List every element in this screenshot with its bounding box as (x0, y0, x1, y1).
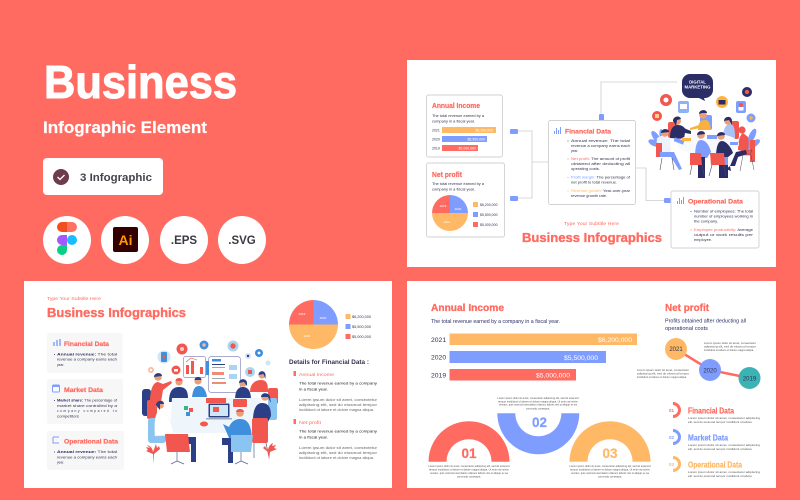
heading: business infographics (522, 221, 662, 245)
card: operational data (47, 431, 124, 470)
list item: financial data: elit, sed do eiusmod tempor incididunt ut labore (688, 420, 752, 424)
pie chart: 2019 (299, 312, 306, 316)
semicircle 01: veniam, quis nostrud exercitation ullamco laboris nisi ut aliquip ex ea (430, 471, 508, 475)
card: financial data: operating costs. (571, 167, 600, 171)
semicircle 02: commodo consequat. (526, 406, 550, 410)
heading: business infographics: Business Infographics (522, 230, 662, 245)
card: annual income: company in a fiscal year. (432, 120, 475, 124)
card: operational data: year. (57, 460, 64, 464)
list item: market data: elit, sed do eiusmod tempor incididunt ut labore (688, 447, 752, 451)
icon: EPS: .EPS (171, 235, 197, 247)
heading: net profit (665, 302, 746, 332)
card: financial data: year. (57, 363, 64, 367)
card: financial data (47, 333, 122, 373)
card: financial data: revenue a company earns each (57, 358, 117, 362)
speech bubble: DIGITAL (689, 80, 706, 84)
list item: operational data: Operational Data (688, 460, 743, 470)
card: annual income: The total revenue earned by a (432, 114, 484, 118)
list item: operational data (669, 456, 760, 478)
card: financial data: Revenue growth: Year-over-year (571, 189, 631, 193)
timeline: net profit: incididunt ut labore et dolore magna aliqua. (704, 348, 754, 352)
details: net profit: Lorem ipsum dolor sit amet, consectetur (299, 446, 378, 450)
card: annual income: 2021 (432, 128, 440, 132)
pie chart (289, 300, 338, 349)
table (170, 398, 264, 433)
card: annual income: Annual Income (432, 103, 480, 110)
details: net profit: Net profit (299, 420, 322, 426)
heading: Business Infographics (47, 305, 186, 320)
pie chart: 2021 (444, 220, 451, 224)
card: annual income: 2020 (432, 138, 440, 142)
card: annual income: 2019 (432, 146, 440, 150)
timeline: net profit: Lorem ipsum dolor sit amet, consectetur (637, 368, 689, 372)
pie legend: $6,200,000 (352, 315, 371, 319)
list item: financial data (669, 402, 760, 424)
semicircle 01: commodo consequat. (457, 474, 481, 478)
heading: Type Your Subtitle Here (47, 296, 101, 301)
list item: financial data: Lorem ipsum dolor sit amet, consectetur adipiscing (688, 416, 760, 420)
semicircle 01: Lorem ipsum dolor sit amet, consectetur adipiscing elit, sed do eiusmod (428, 464, 510, 468)
card: financial data: revenue a company earns each (571, 144, 630, 148)
semicircle 02: 02 (532, 415, 547, 430)
back people (670, 125, 691, 139)
list item: financial data: 01 (669, 408, 675, 413)
card: operational data: output or work results per (694, 233, 754, 237)
right front person (222, 438, 233, 463)
card: market data (47, 379, 123, 424)
icon: illustrator: Ai (118, 232, 132, 248)
card: net profit: $6,200,000 (480, 203, 498, 207)
heading: net profit: Net profit (665, 302, 709, 314)
report bubble (208, 356, 240, 392)
pie chart: 2020 (455, 207, 462, 211)
card: annual income: $5,000,000 (458, 146, 476, 150)
card: net profit (426, 163, 504, 237)
card: market data: Market share: The percentage of (57, 398, 117, 402)
card: operational data: Employee productivity: Average (694, 228, 753, 232)
icon: illustrator (101, 216, 149, 264)
card: operational data: the company. (694, 220, 718, 224)
badge: 3 infographic: 3 Infographic (80, 172, 152, 184)
semicircle 03: veniam, quis nostrud exercitation ullamco laboris nisi ut aliquip ex ea (571, 471, 649, 475)
list item: market data (669, 429, 760, 451)
card: net profit: The total revenue earned by a (432, 182, 484, 186)
card: operational data: Number of employees: The total (694, 210, 753, 214)
timeline: net profit: Lorem ipsum dolor sit amet, consectetur (704, 341, 756, 345)
pie chart: 2021 (304, 334, 311, 338)
card: net profit: Net profit (432, 172, 463, 179)
card: financial data: Financial Data (64, 341, 110, 348)
badge: 3 infographic (43, 158, 163, 195)
table items (184, 406, 188, 410)
chairs back (142, 389, 151, 416)
subtitle: Infographic Element (43, 118, 207, 137)
card: operational data (671, 191, 759, 248)
details: annual income (294, 371, 378, 412)
card: net profit: $5,000,000 (480, 223, 498, 227)
card: net profit: $5,500,000 (480, 213, 498, 217)
pie chart: 2020 (320, 316, 327, 320)
bar chart: $5,500,000 (564, 355, 598, 362)
card: financial data: net profit to total revenue. (571, 180, 617, 184)
main title: Business (44, 56, 237, 108)
heading: business infographics: Type Your Subtitle Here (564, 221, 620, 226)
illustration: meeting table (142, 340, 278, 464)
list item: market data: 02 (669, 435, 675, 440)
side right person (253, 403, 271, 422)
pie chart (432, 195, 468, 231)
speech bubble: MARKETING (684, 84, 711, 90)
details: annual income: Annual Income (299, 372, 334, 378)
back row people (150, 381, 172, 402)
semicircle 01: tempor incididunt ut labore et dolore magna aliqua. Ut enim ad minim (429, 468, 510, 472)
details: net profit: The total revenue earned by a company (299, 428, 377, 434)
connectors (518, 82, 677, 200)
timeline: net profit: incididunt ut labore et dolore magna aliqua. (637, 375, 687, 379)
card: operational data: employee. (694, 238, 712, 242)
semicircle 01 (428, 421, 510, 478)
left front person (148, 418, 166, 443)
details: net profit: adipiscing elit, sed do eiusmod tempor (299, 451, 378, 455)
card: financial data: year. (571, 149, 578, 153)
card: market data: market share controlled by a (57, 404, 117, 408)
back chairs (668, 122, 677, 138)
card: financial data: Profit margin: The percentage of (571, 176, 630, 180)
illustration: digital marketing team (647, 74, 761, 178)
heading: annual income: The total revenue earned by a company in a fiscal year. (431, 319, 560, 325)
card: operational data: Operational Data (64, 438, 119, 446)
pie legend (346, 314, 371, 339)
timeline: net profit (637, 338, 760, 389)
details: annual income: adipiscing elit, sed do eiusmod tempor (299, 403, 378, 407)
semicircle 01: 01 (461, 446, 477, 461)
details: net profit (294, 419, 378, 460)
heading: net profit: Profits obtained after deducting all (665, 318, 746, 324)
table (677, 133, 739, 155)
laptop (208, 404, 230, 418)
details: net profit: incididunt ut labore et dolore magna aliqua. (299, 456, 374, 460)
heading: annual income: Annual Income (431, 302, 504, 314)
list item: operational data: Lorem ipsum dolor sit amet, consectetur adipiscing (688, 470, 760, 474)
list item: market data: Market Data (688, 434, 729, 442)
panel: top right mind map (407, 60, 776, 267)
icon: figma (43, 216, 91, 264)
details heading: Details for Financial Data : (289, 359, 369, 366)
timeline: net profit: 2021 (669, 347, 683, 353)
semicircle 02: veniam, quis nostrud exercitation ullamco laboris nisi ut aliquip ex ea (499, 403, 577, 407)
icon: EPS (160, 216, 208, 264)
list item: operational data: elit, sed do eiusmod tempor incididunt ut labore (688, 474, 752, 478)
card: market data: company compared to (57, 409, 117, 413)
timeline: net profit: adipiscing elit, sed do eiusmod tempor (637, 372, 689, 376)
card: financial data: obtained after deducting all (571, 162, 630, 166)
card: annual income (426, 95, 502, 157)
chart bubble (184, 356, 206, 378)
card: financial data: Net profit: The amount of profit (571, 157, 630, 161)
card: operational data: number of employees working in (694, 214, 753, 218)
card: annual income: $6,200,000 (475, 128, 493, 132)
card: financial data (548, 120, 636, 204)
semicircle 02: Lorem ipsum dolor sit amet, consectetur adipiscing elit, sed do eiusmod (498, 396, 579, 400)
heading: annual income (431, 302, 560, 325)
pie chart: 2019 (440, 204, 447, 208)
heading: net profit: operational costs (665, 326, 709, 332)
card: financial data: Financial Data (565, 128, 611, 136)
semicircle 03 (570, 421, 651, 478)
card: operational data: Annual revenue: The total (57, 450, 117, 454)
details: annual income: Lorem ipsum dolor sit amet, consectetur (299, 398, 378, 402)
plants (647, 127, 761, 153)
details: net profit: in a fiscal year. (299, 434, 328, 440)
floating icons (176, 344, 188, 354)
card: financial data: revenue growth rate. (571, 194, 607, 198)
icon: SVG: .SVG (228, 235, 256, 247)
details: annual income: The total revenue earned by a company (299, 380, 377, 386)
bar chart: 2021 (431, 337, 446, 344)
card: annual income: $5,500,000 (467, 138, 485, 142)
plants (146, 444, 160, 464)
connector nodes (510, 114, 672, 203)
speech bubble (682, 74, 713, 101)
bar chart (431, 334, 637, 380)
icon: SVG (218, 216, 266, 264)
list item: operational data: 03 (669, 462, 675, 467)
bar chart: $6,200,000 (598, 337, 632, 344)
heading (47, 296, 186, 320)
semicircle 03: tempor incididunt ut labore et dolore magna aliqua. Ut enim ad minim (570, 468, 651, 472)
panel: bottom right charts (407, 281, 776, 488)
timeline: net profit: adipiscing elit, sed do eiusmod tempor (704, 344, 756, 348)
semicircle 03: 03 (602, 446, 618, 461)
list item: financial data: Financial Data (688, 406, 735, 416)
semicircle 02 (497, 396, 579, 454)
bar chart: $5,000,000 (536, 372, 570, 380)
details: annual income: incididunt ut labore et dolore magna aliqua. (299, 408, 374, 412)
card: operational data: Operational Data (688, 198, 744, 206)
list item: market data: Lorem ipsum dolor sit amet, consectetur adipiscing (688, 443, 760, 447)
timeline: net profit: 2019 (743, 376, 757, 382)
pie legend: $5,000,000 (352, 335, 371, 339)
card: financial data: Annual revenue: The total (57, 352, 117, 356)
semicircle 02: tempor incididunt ut labore et dolore magna aliqua. Ut enim ad minim (498, 399, 579, 403)
panel: bottom left team overview (24, 281, 392, 488)
bar chart: 2020 (431, 354, 446, 362)
side people and front people (726, 150, 747, 171)
semicircle 03: commodo consequat. (598, 474, 622, 478)
details: annual income: in a fiscal year. (299, 386, 328, 392)
bar chart: 2019 (431, 372, 446, 380)
card: market data: Market Data (64, 387, 104, 394)
semicircle 03: Lorem ipsum dolor sit amet, consectetur adipiscing elit, sed do eiusmod (570, 464, 651, 468)
timeline: net profit: 2020 (703, 368, 717, 374)
card: operational data: revenue a company earns each (57, 456, 117, 460)
card: net profit: company in a fiscal year. (432, 188, 475, 192)
card: financial data: Annual revenue: The total (571, 139, 630, 143)
card: market data: competitors (57, 414, 79, 418)
pie legend: $5,500,000 (352, 325, 371, 329)
